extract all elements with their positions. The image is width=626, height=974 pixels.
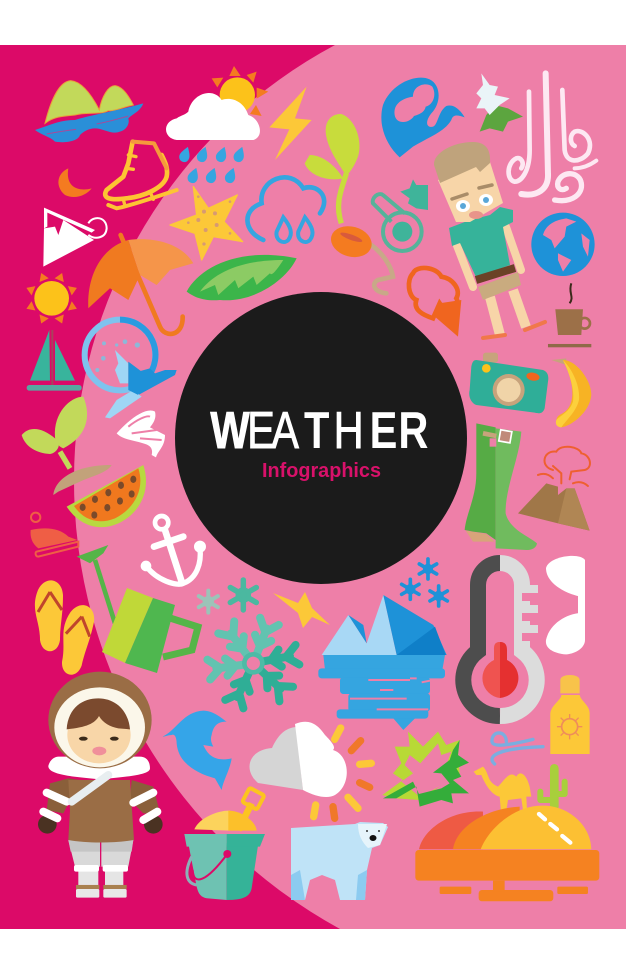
icon: cactus [540, 768, 565, 807]
illustration: desert dunes and reflection [415, 806, 599, 901]
icon: watering can spout [77, 545, 115, 623]
icon: watermelon slice [67, 465, 146, 527]
character: girl in fur parka [38, 672, 163, 898]
icon: white sunglasses [546, 556, 585, 654]
icon: flip flops [35, 580, 97, 677]
character: boy in green shirt [434, 142, 545, 338]
icon: snowy mountain peak [43, 208, 107, 267]
title: W [210, 401, 250, 459]
icon: teal arrow [400, 179, 428, 210]
icon: iceberg reflection in water [318, 655, 445, 730]
icon: crescent moon [58, 168, 92, 197]
icon: sprout in soil [22, 397, 112, 495]
icon: lower lightning bolt [273, 592, 330, 628]
title: R [398, 401, 428, 459]
icon: white wind swirls [509, 73, 596, 201]
icon: winter hat [31, 513, 78, 557]
icon: cloud with sun rays [250, 722, 371, 818]
icon: dolphin [163, 711, 232, 790]
icon: maple leaf outline [382, 732, 469, 807]
icon: watering can body and handle [102, 588, 198, 673]
icon: mountains and waves [35, 81, 143, 142]
icon: tornado [117, 410, 165, 457]
icon: rain drops [178, 145, 247, 184]
title: A [271, 401, 299, 459]
icon: cloud outline with drops [247, 177, 324, 242]
icon: iceberg [322, 595, 447, 655]
icon: starfish [170, 187, 243, 260]
icon: bucket and spade [184, 788, 265, 900]
icon: snow globe [85, 320, 177, 418]
icon: banana [551, 358, 591, 427]
icon: coffee cup with steam [548, 283, 591, 347]
icon: sun behind white cloud [166, 66, 268, 140]
icon: sunscreen bottle [550, 675, 590, 754]
icon: ice cream cone [409, 268, 461, 337]
icon: green rubber boot [465, 423, 537, 550]
title: T [304, 401, 330, 459]
icon: sprouting seed [305, 114, 393, 293]
icon: three blue snowflakes [402, 559, 447, 606]
icon: erupting volcano [518, 447, 590, 531]
icon: camel [474, 767, 531, 815]
title: H [334, 401, 364, 459]
icon: large thermometer [463, 563, 538, 716]
icon: small outline thermometer [373, 194, 422, 251]
icon: globe [531, 213, 595, 276]
icon: camera [469, 353, 548, 413]
subtitle: Infographics [262, 460, 381, 482]
icon: umbrella [88, 235, 193, 334]
icon: two small teal snowflakes [199, 580, 256, 613]
icon: ice skate [105, 142, 177, 208]
title: E [370, 401, 397, 459]
black centre circle [175, 292, 467, 584]
icon: large teal snowflake [207, 618, 299, 708]
title: E [247, 401, 275, 459]
icon: blue wind [492, 733, 543, 764]
icon: blue wave [381, 78, 465, 157]
icon: sailboat [27, 330, 82, 391]
icon: polar bear [291, 822, 388, 900]
icon: lightning bolt [269, 87, 312, 160]
icon: green leaf [187, 255, 297, 300]
icon: snowy fir tree [476, 73, 523, 132]
icon: sun, left [24, 271, 79, 325]
icon: anchor [141, 516, 205, 584]
